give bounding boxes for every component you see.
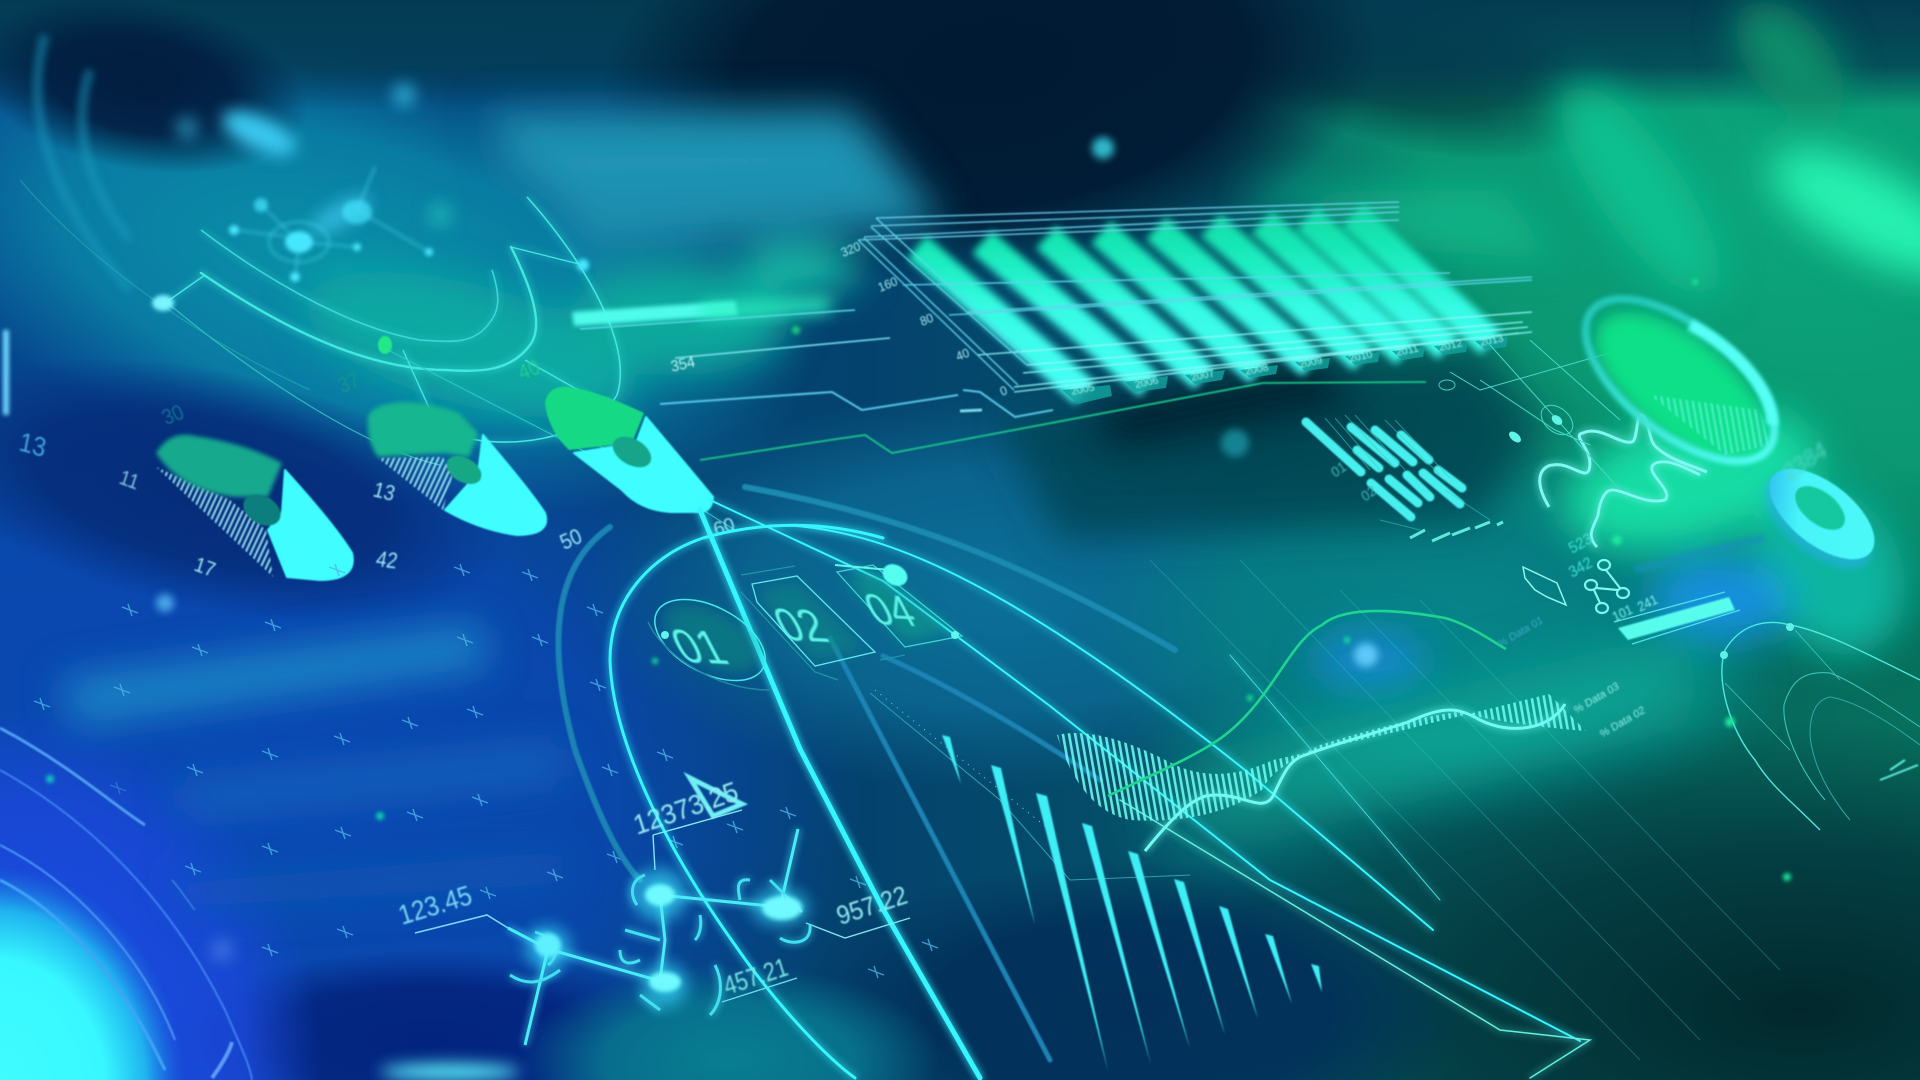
triangle marker and value labels <box>394 775 911 1002</box>
plus markers <box>34 564 938 978</box>
bars <box>917 215 1491 393</box>
spike bar chart <box>870 690 1322 1071</box>
value label 457.21: 457.21 <box>720 953 791 1001</box>
donut value label: 2384 <box>1779 435 1830 487</box>
faint chart rays <box>1150 560 1780 1060</box>
legend items <box>1496 614 1647 741</box>
small node graph: 523 <box>1566 530 1595 558</box>
menu badge 02 <box>741 566 905 680</box>
bar chart 2005-2013: 2013 <box>1478 333 1505 349</box>
pie value labels: 37 <box>335 369 364 398</box>
pie value labels: 50 <box>556 524 586 555</box>
highlighted rectangle bar: 241 <box>1635 591 1660 615</box>
bar chart 2005-2013: 2005 <box>1069 382 1096 398</box>
menu badge 01: 01 <box>662 620 737 675</box>
pie value labels <box>116 356 738 582</box>
axis numbers: 160 <box>876 274 900 295</box>
menu badge 04 <box>835 560 962 647</box>
large arcs and lines <box>558 487 1590 1078</box>
radar arcs bottom right <box>1720 622 1920 830</box>
axis grid <box>858 202 1532 392</box>
year tabs <box>1062 337 1508 404</box>
small donut chart <box>1748 451 1890 586</box>
value label 123.45: 123.45 <box>394 879 476 931</box>
small node graph <box>1566 530 1629 613</box>
menu badge 04: 04 <box>856 586 925 636</box>
value label 12373.25 <box>629 775 742 870</box>
axis numbers <box>839 239 1009 399</box>
left marker bar <box>3 330 49 463</box>
left marker bar: 13 <box>17 428 49 463</box>
pie value labels: 40 <box>515 356 544 385</box>
pie value labels: 17 <box>191 553 218 582</box>
network nodes <box>152 167 611 435</box>
pie value labels: 30 <box>159 401 188 430</box>
value label 12373.25: 12373.25 <box>629 775 742 841</box>
bar chart 2005-2013: 2010 <box>1347 349 1374 365</box>
triangle icon <box>690 778 742 816</box>
pie chart 3 <box>545 387 713 512</box>
axis numbers: 80 <box>918 310 936 329</box>
large donut chart <box>1558 268 1802 492</box>
capsule matrix chart: 02 <box>1358 482 1380 506</box>
value label 957.22 <box>806 881 911 938</box>
bar chart 2005-2013: 2008 <box>1243 362 1270 378</box>
capsule matrix chart <box>1306 415 1503 541</box>
pie value labels: 60 <box>711 514 738 541</box>
axis numbers: 0 <box>998 383 1009 399</box>
legend items: % Data 01 <box>1496 614 1545 651</box>
node graph bottom <box>508 829 810 1045</box>
menu badge 02: 02 <box>764 599 837 652</box>
pie value labels: 42 <box>374 547 400 574</box>
radar network top-left <box>3 35 735 530</box>
highlighted rectangle bar <box>1610 535 1766 644</box>
bottom-left radial core <box>0 728 520 1080</box>
pie chart 1 <box>156 435 353 580</box>
bar chart 2005-2013: 2012 <box>1437 338 1464 354</box>
legend items: % Data 02 <box>1598 704 1647 741</box>
legend items: % Data 03 <box>1572 680 1621 717</box>
arrow icon <box>1523 567 1566 605</box>
bar chart 2005-2013: 2011 <box>1394 343 1421 359</box>
capsules <box>1306 422 1462 517</box>
menu badge 01 <box>642 583 778 697</box>
small node graph: 342 <box>1566 554 1595 582</box>
top progress bar and circuit lines <box>572 298 1426 460</box>
pie chart 2 <box>368 402 546 535</box>
bar chart 2005-2013: 2009 <box>1297 355 1324 371</box>
bar chart 2005-2013: 2006 <box>1133 375 1160 391</box>
capsule matrix chart: 01 <box>1328 458 1350 482</box>
pie value labels: 11 <box>116 466 142 495</box>
pie value labels: 13 <box>371 478 398 506</box>
axis numbers: 320 <box>839 239 863 260</box>
cyan trend line <box>1145 704 1565 851</box>
value label 957.22: 957.22 <box>833 881 911 931</box>
small value label: 354 <box>669 353 697 376</box>
glowing particles <box>156 137 1378 667</box>
highlighted rectangle bar: 101 <box>1610 601 1635 625</box>
axis numbers: 40 <box>954 345 972 364</box>
bar chart 2005-2013 <box>839 202 1532 404</box>
hatched area <box>1057 694 1586 821</box>
area and line chart <box>1057 560 1780 1060</box>
wave line chart right <box>1439 340 1707 547</box>
green trend line <box>1108 611 1506 796</box>
bar chart 2005-2013: 2007 <box>1189 368 1216 384</box>
